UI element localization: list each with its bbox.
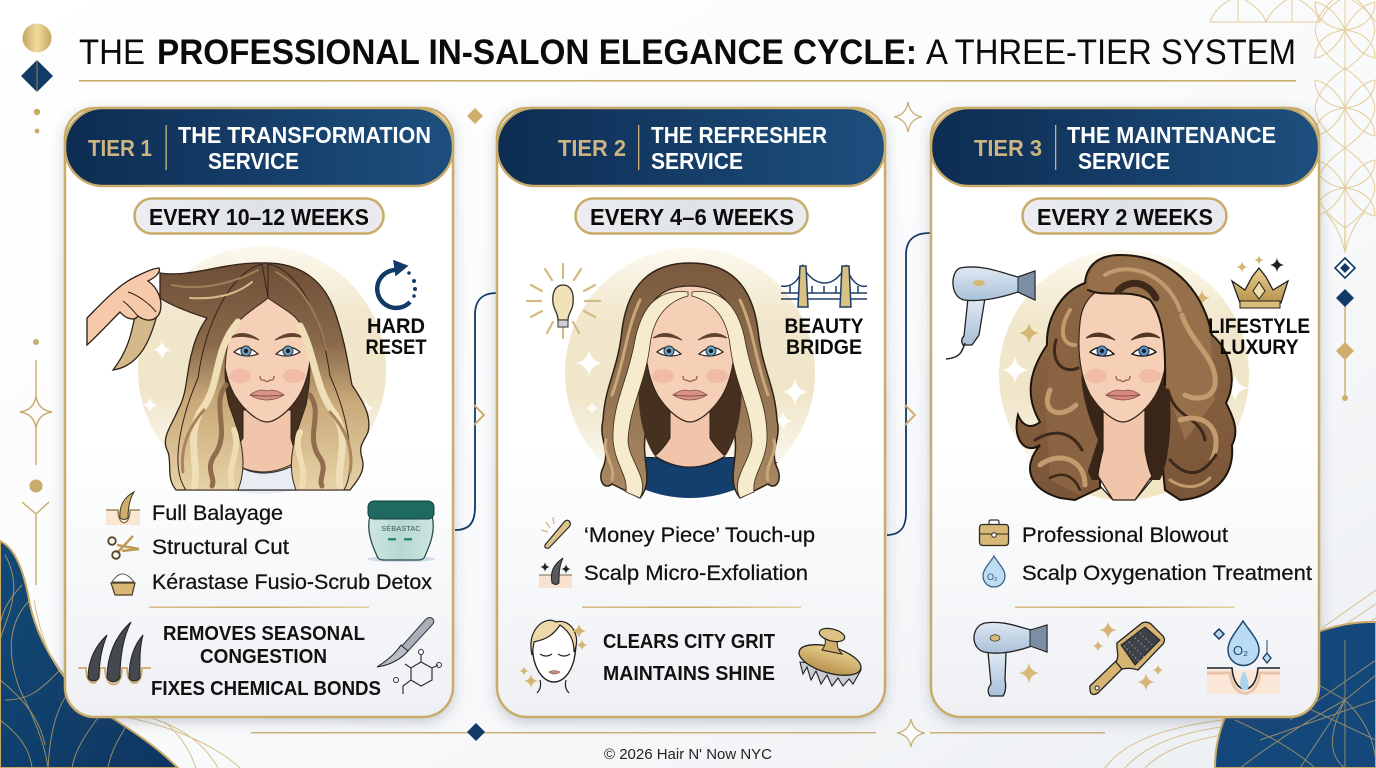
hair swoop and waves bbox=[1088, 257, 1215, 440]
icon: product jar: SÉBASTAC bbox=[381, 524, 421, 533]
title: PROFESSIONAL IN-SALON ELEGANCE CYCLE: bbox=[157, 33, 917, 72]
header band: TIER 1 bbox=[88, 135, 152, 161]
face bbox=[1079, 284, 1167, 422]
benefits text: CONGESTION bbox=[200, 646, 327, 668]
card background bbox=[931, 108, 1319, 717]
ornament: star top bbox=[894, 102, 922, 132]
service: fusio-scrub detox: Kérastase Fusio-Scrub Detox bbox=[152, 571, 432, 594]
divider bbox=[582, 606, 801, 608]
icon: hand holding hair strand bbox=[87, 268, 161, 370]
left ornament line bbox=[20, 339, 52, 585]
panel: tier 3 bbox=[931, 108, 1319, 717]
face bbox=[645, 286, 735, 422]
icon: paddle brush bbox=[1090, 621, 1164, 694]
title: A THREE-TIER SYSTEM bbox=[926, 33, 1296, 72]
service: professional blowout: Professional Blowout bbox=[1022, 524, 1228, 547]
label: hard reset: HARD bbox=[367, 315, 425, 338]
label: hard reset: RESET bbox=[366, 336, 427, 359]
right ornament line bbox=[1335, 258, 1355, 401]
header band: TIER 3 bbox=[974, 135, 1042, 161]
service: money piece touch-up bbox=[541, 517, 815, 548]
benefits text bbox=[603, 631, 775, 685]
header band bbox=[65, 108, 453, 186]
card background bbox=[497, 108, 885, 717]
icon: hair follicles bbox=[78, 622, 151, 684]
icon: bridge bbox=[781, 266, 867, 307]
label: lifestyle luxury: LUXURY bbox=[1220, 336, 1298, 359]
arrow: tier 2 to tier 3 connector bbox=[887, 233, 930, 535]
ornament: gold diamond top bbox=[467, 108, 483, 124]
decorative blob: bottom left navy wave bbox=[0, 541, 240, 768]
icon: scalp massager bbox=[796, 626, 864, 686]
decorative pattern: top right gold scallops bbox=[1210, 0, 1376, 252]
title: THE bbox=[79, 33, 145, 72]
icon: relaxed face bbox=[519, 620, 588, 693]
footer rule bbox=[251, 719, 1105, 747]
panel: tier 2 bbox=[497, 108, 885, 717]
header band: TIER 2 bbox=[558, 135, 626, 161]
label: beauty bridge bbox=[784, 315, 864, 359]
label: hard reset bbox=[366, 315, 427, 359]
benefits text bbox=[151, 623, 381, 700]
benefits text: REMOVES SEASONAL bbox=[163, 623, 365, 645]
icon: gold circle and navy diamond bbox=[21, 24, 53, 133]
header band: SERVICE bbox=[1078, 148, 1170, 174]
header band: THE MAINTENANCE bbox=[1067, 122, 1276, 148]
front hair locks bbox=[178, 264, 268, 490]
header band: THE TRANSFORMATION bbox=[178, 122, 431, 148]
portrait: balayage hair bbox=[138, 246, 386, 495]
decorative blob: bottom right navy circle bbox=[1105, 590, 1376, 768]
service: full balayage: Full Balayage bbox=[152, 502, 283, 525]
face bbox=[223, 294, 311, 422]
divider bbox=[1015, 606, 1235, 608]
label: lifestyle luxury: LIFESTYLE bbox=[1208, 315, 1310, 338]
panel: tier 1 bbox=[65, 108, 453, 717]
icon: hair dryer bottom bbox=[974, 622, 1047, 696]
header band: SERVICE bbox=[651, 148, 743, 174]
frequency pill: EVERY 4–6 WEEKS bbox=[590, 204, 794, 230]
frequency pill bbox=[576, 198, 808, 234]
service: full balayage bbox=[106, 492, 283, 525]
header band bbox=[497, 108, 885, 186]
service: scalp oxygenation: Scalp Oxygenation Treatment bbox=[1022, 562, 1312, 585]
frequency pill bbox=[1022, 198, 1226, 234]
header band bbox=[931, 108, 1319, 186]
service: money piece touch-up: ‘Money Piece’ Touch-up bbox=[584, 524, 815, 547]
label: beauty bridge: BRIDGE bbox=[786, 336, 862, 359]
header band: THE REFRESHER bbox=[651, 122, 827, 148]
frequency pill bbox=[134, 198, 384, 234]
benefits text: CLEARS CITY GRIT bbox=[603, 631, 775, 653]
service: scalp oxygenation bbox=[983, 556, 1312, 587]
icon: hair dryer top bbox=[946, 267, 1035, 359]
service: scalp micro-exfoliation: Scalp Micro-Exfoliation bbox=[584, 562, 808, 585]
icon: product jar bbox=[367, 501, 435, 562]
portrait: money piece hair bbox=[565, 248, 815, 500]
frequency pill: EVERY 10–12 WEEKS bbox=[149, 204, 369, 230]
blonde money pieces bbox=[613, 292, 688, 498]
label: beauty bridge: BEAUTY bbox=[784, 315, 864, 338]
header band: SERVICE bbox=[208, 148, 299, 174]
icon: crown bbox=[1232, 255, 1288, 308]
footer copyright: © 2026 Hair N' Now NYC bbox=[604, 747, 772, 763]
icon: oxygen drop and follicle bbox=[1207, 621, 1280, 694]
icon: oxygen drop and follicle: O₂ bbox=[1233, 643, 1248, 658]
arrow: tier 1 to tier 2 connector bbox=[455, 293, 497, 530]
service: professional blowout bbox=[980, 520, 1228, 547]
icon: light bulb bbox=[527, 264, 600, 338]
icon: hard reset arrow bbox=[377, 261, 417, 308]
card background bbox=[65, 108, 453, 717]
service: scalp micro-exfoliation bbox=[539, 558, 808, 588]
divider bbox=[149, 606, 369, 608]
benefits text: FIXES CHEMICAL BONDS bbox=[151, 678, 381, 700]
label: lifestyle luxury bbox=[1208, 315, 1310, 359]
frequency pill: EVERY 2 WEEKS bbox=[1037, 204, 1213, 230]
shirt over hair centre bbox=[232, 462, 300, 490]
service: structural cut: Structural Cut bbox=[152, 536, 289, 559]
service: scalp oxygenation: O₂ bbox=[987, 572, 998, 582]
benefits text: MAINTAINS SHINE bbox=[603, 663, 775, 685]
icon: scalpel and molecule bbox=[377, 618, 442, 694]
title bbox=[79, 33, 1296, 72]
portrait: blowout hair bbox=[999, 250, 1249, 500]
